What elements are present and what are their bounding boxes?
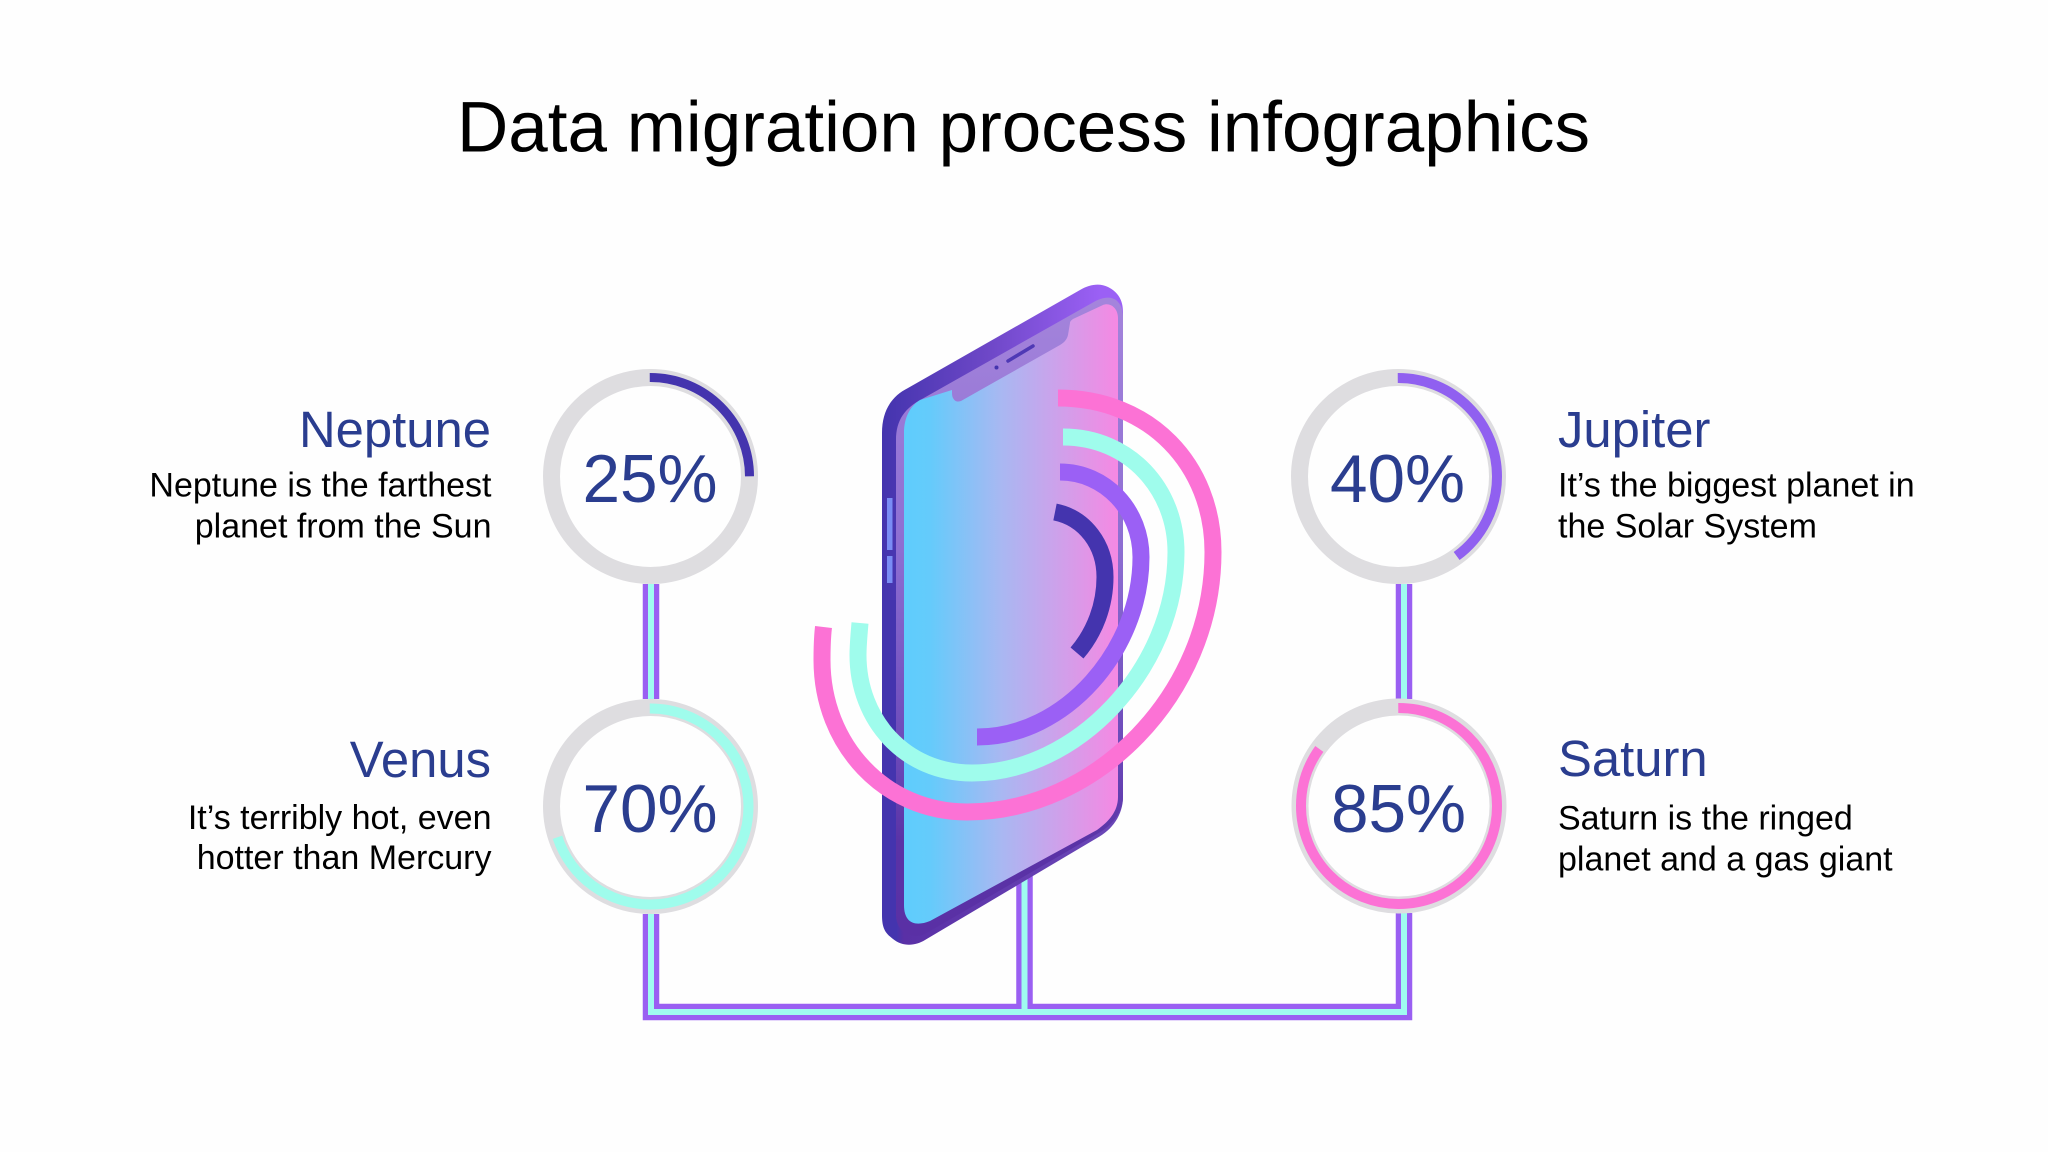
- Jupiter heading: Jupiter: [1558, 401, 1711, 458]
- panel: Saturn: [1300, 707, 1893, 905]
- Saturn progress ring: 85%: [1331, 772, 1466, 847]
- Neptune description: planet from the Sun: [195, 508, 492, 546]
- Neptune heading: Neptune: [299, 401, 491, 458]
- arc: indigo inner: [1055, 512, 1105, 653]
- arc: mint: [858, 437, 1176, 773]
- camera: [994, 366, 998, 370]
- infographic canvas: [152, 100, 1912, 1020]
- phone illustration: [882, 285, 1123, 945]
- phone body: [882, 285, 1123, 945]
- Jupiter description: the Solar System: [1558, 508, 1817, 546]
- Saturn progress ring: [1300, 707, 1498, 905]
- Saturn description: planet and a gas giant: [1558, 840, 1893, 878]
- panel: Venus: [188, 708, 750, 906]
- speaker: [1008, 346, 1033, 361]
- side buttons: [887, 498, 892, 583]
- Venus progress ring: 70%: [582, 772, 718, 847]
- Neptune progress ring: [552, 378, 750, 576]
- Venus description: It’s terribly hot, even: [188, 799, 492, 837]
- panel: Neptune: [149, 378, 750, 576]
- Venus description: hotter than Mercury: [197, 839, 492, 877]
- Jupiter progress ring: 40%: [1330, 442, 1465, 517]
- phone bezel: [896, 298, 1123, 936]
- connector lines: [651, 584, 1404, 1012]
- Jupiter progress ring: [1300, 378, 1498, 576]
- Saturn heading: Saturn: [1558, 730, 1708, 787]
- Venus progress ring: [552, 708, 750, 906]
- Venus heading: Venus: [350, 731, 491, 788]
- Jupiter description: It’s the biggest planet in: [1558, 466, 1915, 504]
- panel: Jupiter: [1300, 378, 1915, 576]
- Neptune description: Neptune is the farthest: [149, 466, 492, 504]
- Saturn description: Saturn is the ringed: [1558, 800, 1853, 838]
- arc: violet: [977, 472, 1141, 737]
- signal arcs: [822, 398, 1213, 812]
- arc: pink outer: [822, 398, 1213, 812]
- Neptune progress ring: 25%: [582, 442, 718, 517]
- phone screen: [904, 304, 1118, 924]
- title: Data migration process infographics: [457, 88, 1590, 168]
